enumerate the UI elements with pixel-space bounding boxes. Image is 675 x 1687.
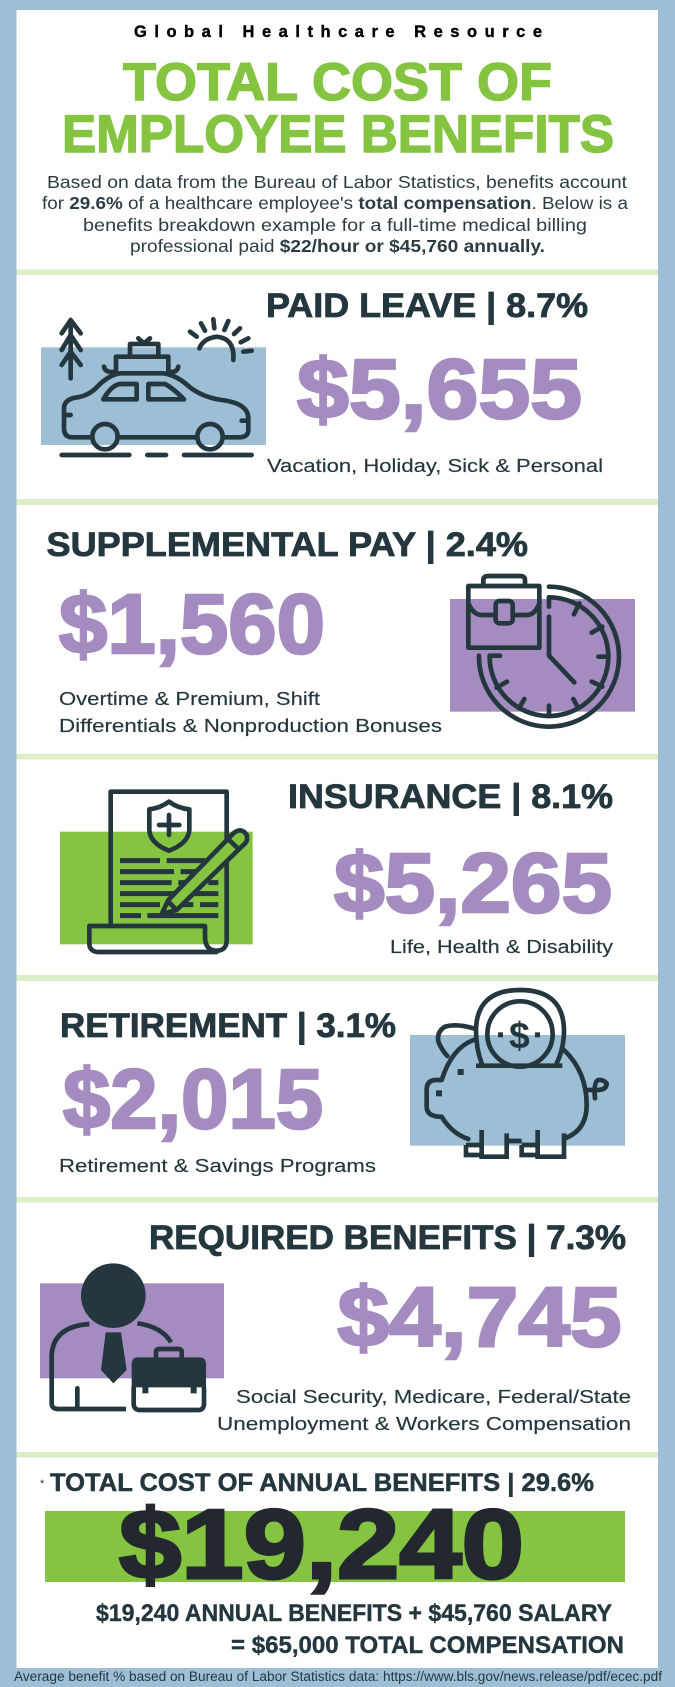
- amount: supplemental pay: $1,560: [59, 577, 325, 671]
- heading: retirement: RETIREMENT | 3.1%: [60, 1007, 396, 1045]
- total amount: $19,240: [119, 1489, 524, 1599]
- description: supplemental pay: [59, 689, 442, 736]
- title: TOTAL COST OF: [123, 53, 552, 112]
- panel: total cost: [40, 1469, 625, 1659]
- intro paragraph: professional paid $22/hour or $45,760 annually.: [130, 236, 545, 256]
- description: required benefits: Social Security, Medicare, Federal/State: [236, 1387, 631, 1407]
- brand name: Global Healthcare Resource: [134, 23, 542, 41]
- heading: supplemental pay: SUPPLEMENTAL PAY | 2.4%: [46, 526, 528, 564]
- heading: required benefits: REQUIRED BENEFITS | 7.3%: [149, 1219, 626, 1257]
- intro paragraph: for 29.6% of a healthcare employee's total compensation . Below is a: [42, 193, 628, 213]
- panel: insurance: [60, 778, 613, 957]
- panel: retirement: [59, 990, 625, 1176]
- heading: total cost: TOTAL COST OF ANNUAL BENEFITS | 29.6%: [50, 1469, 594, 1497]
- amount: required benefits: $4,745: [338, 1270, 622, 1364]
- amount: retirement: $2,015: [63, 1052, 323, 1146]
- title: EMPLOYEE BENEFITS: [62, 105, 614, 164]
- panel: required benefits: [40, 1219, 631, 1434]
- title: [62, 53, 614, 164]
- source footnote: Average benefit % based on Bureau of Labor Statistics data: https://www.bls.gov/news.release/pdf/ecec.pdf: [14, 1669, 662, 1684]
- panel: paid leave: [41, 287, 603, 476]
- compensation equation: = $65,000 TOTAL COMPENSATION: [231, 1632, 624, 1659]
- description: retirement: Retirement & Savings Programs: [59, 1156, 376, 1176]
- amount: paid leave: $5,655: [297, 342, 582, 436]
- green highlight bar: [45, 1511, 625, 1582]
- description: required benefits: Unemployment & Workers Compensation: [217, 1414, 631, 1434]
- panel: header: [42, 23, 628, 256]
- icon: piggy bank with coin: [410, 990, 625, 1157]
- icon: briefcase and clock: [450, 576, 635, 727]
- coin dollar sign: $: [509, 1014, 530, 1056]
- description: insurance: Life, Health & Disability: [390, 937, 613, 957]
- asterisk: *: [40, 1478, 45, 1490]
- description: required benefits: [217, 1387, 631, 1434]
- description: paid leave: Vacation, Holiday, Sick & Personal: [267, 456, 603, 476]
- intro paragraph: benefits breakdown example for a full-time medical billing: [83, 215, 587, 235]
- description: supplemental pay: Differentials & Nonproduction Bonuses: [59, 716, 442, 736]
- panel: supplemental pay: [46, 526, 635, 736]
- heading: insurance: INSURANCE | 8.1%: [288, 778, 613, 816]
- icon: insurance document and pen: [60, 792, 253, 952]
- compensation equation: $19,240 ANNUAL BENEFITS + $45,760 SALARY: [96, 1600, 612, 1627]
- icon: businessperson with briefcase: [40, 1263, 224, 1410]
- amount: insurance: $5,265: [334, 836, 612, 930]
- icon: car with luggage, tree and sun: [41, 319, 266, 455]
- heading: paid leave: PAID LEAVE | 8.7%: [266, 287, 588, 325]
- intro paragraph: Based on data from the Bureau of Labor Statistics, benefits account: [47, 172, 627, 192]
- description: supplemental pay: Overtime & Premium, Shift: [59, 689, 320, 709]
- intro paragraph: [42, 172, 628, 256]
- compensation equation: [96, 1600, 624, 1659]
